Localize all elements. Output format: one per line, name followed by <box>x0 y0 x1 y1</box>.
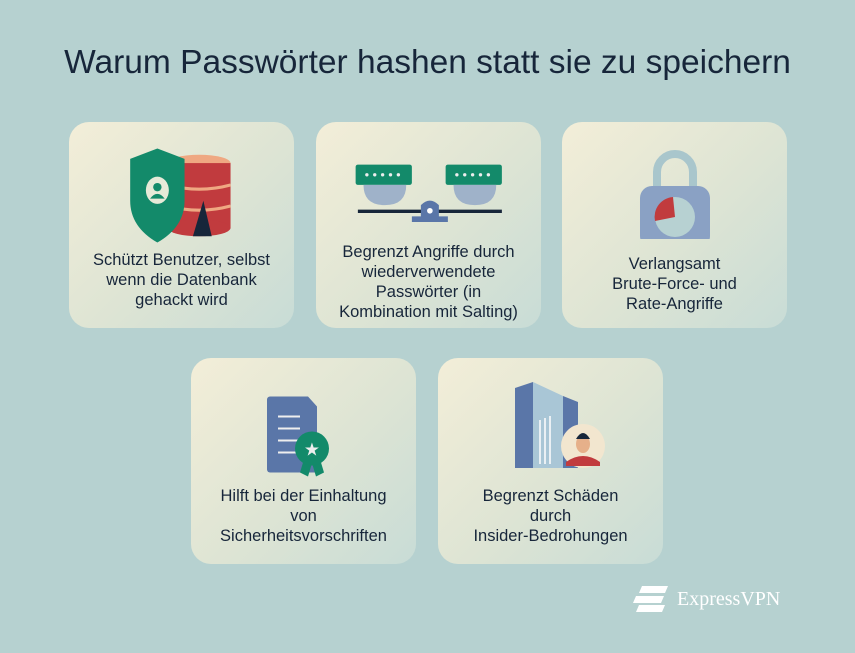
icon: scale with passwords <box>356 164 502 222</box>
text: Begrenzt Angriffe durch <box>342 243 515 261</box>
text: Passwörter (in <box>376 283 481 301</box>
text: Verlangsamt <box>629 255 720 273</box>
logo: ExpressVPN: ExpressVPN <box>677 588 780 610</box>
title: Warum Passwörter hashen statt sie zu speichern <box>64 44 791 81</box>
text <box>612 255 737 313</box>
panel: protects users <box>69 122 294 328</box>
text: Schützt Benutzer, selbst <box>93 251 270 269</box>
text: Hilft bei der Einhaltung <box>220 487 386 505</box>
panel: compliance <box>191 358 416 564</box>
text: durch <box>530 507 571 525</box>
text: wiederverwendete <box>362 263 495 281</box>
panel: insider threats <box>438 358 663 564</box>
text: gehackt wird <box>135 291 228 309</box>
text: Begrenzt Schäden <box>483 487 618 505</box>
icon: shield and database <box>130 148 231 242</box>
text: wenn die Datenbank <box>106 271 257 289</box>
text <box>220 487 387 545</box>
panel: slows brute force <box>562 122 787 328</box>
text: Rate-Angriffe <box>626 295 723 313</box>
text <box>93 251 270 309</box>
text: Kombination mit Salting) <box>339 303 518 321</box>
text <box>473 487 628 545</box>
text: von <box>290 507 317 525</box>
logo: ExpressVPN <box>633 586 780 612</box>
text: Sicherheitsvorschriften <box>220 527 387 545</box>
text <box>339 243 518 321</box>
icon: certificate <box>267 396 329 476</box>
text: Insider-Bedrohungen <box>473 527 628 545</box>
panel: reused passwords <box>316 122 541 328</box>
icon: building with person <box>515 382 605 468</box>
text: Brute-Force- und <box>612 275 737 293</box>
icon: padlock <box>640 150 710 239</box>
icon: certificate: ★ <box>304 440 320 460</box>
